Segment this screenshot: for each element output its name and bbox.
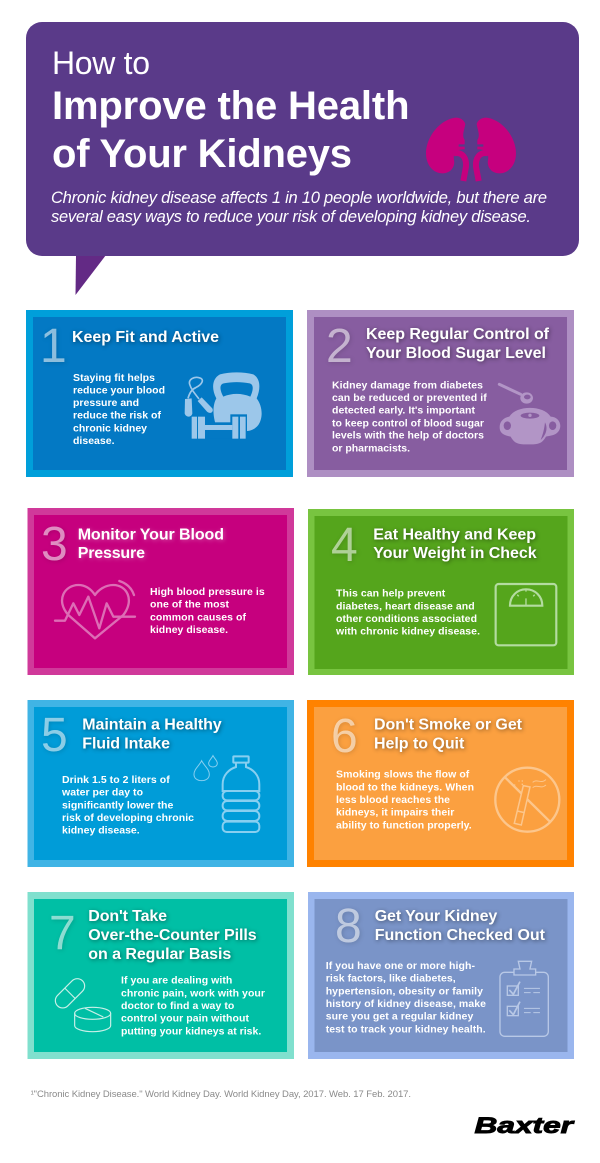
body 2: can be reduced or prevented if xyxy=(332,392,487,404)
body 8 xyxy=(326,960,486,1035)
title 2: Keep Regular Control of xyxy=(366,326,550,343)
title 4: Your Weight in Check xyxy=(373,545,537,562)
footnote citation: ¹"Chronic Kidney Disease." World Kidney Day. World Kidney Day, 2017. Web. 17 Feb. 2017. xyxy=(31,1089,411,1100)
body 7: putting your kidneys at risk. xyxy=(121,1025,261,1037)
body 7: doctor to find a way to xyxy=(121,1000,234,1012)
title 7: Over-the-Counter Pills xyxy=(88,927,257,944)
body 5: water per day to xyxy=(61,787,143,799)
panel 4: Eat Healthy and Keep Your Weight in Check xyxy=(308,509,574,675)
body 6: Smoking slows the flow of xyxy=(336,769,470,781)
body 6: blood to the kidneys. When xyxy=(336,781,474,793)
title 6: Help to Quit xyxy=(374,735,465,752)
body 3: common causes of xyxy=(150,611,246,623)
heading: How to: How to xyxy=(52,45,150,81)
icon: heart with pulse xyxy=(55,581,135,638)
icon: kettlebell, dumbbell and jump rope xyxy=(185,372,262,439)
body 4: diabetes, heart disease and xyxy=(336,600,475,612)
body 3: High blood pressure is xyxy=(150,586,265,598)
body 6: ability to function properly. xyxy=(336,819,472,831)
body 6: kidneys, it impairs their xyxy=(336,807,454,819)
number 2: 2 xyxy=(326,320,353,373)
number 8: 8 xyxy=(335,900,362,953)
body 8: history of kidney disease, make xyxy=(326,998,486,1010)
title 2: Your Blood Sugar Level xyxy=(366,345,546,362)
title 3: Monitor Your Blood xyxy=(78,526,224,544)
panel 3: Monitor Your Blood Pressure xyxy=(28,508,294,675)
body 4 xyxy=(335,588,480,638)
body 2: levels with the help of doctors xyxy=(332,430,484,442)
heading: Improve the Health of Your Kidneys xyxy=(52,84,410,176)
intro text xyxy=(51,189,547,226)
number 5: 5 xyxy=(41,709,68,762)
panel 6: Don't Smoke or Get Help to Quit xyxy=(307,700,574,867)
body 2: to keep control of blood sugar xyxy=(332,417,484,429)
body 5: significantly lower the xyxy=(62,799,173,811)
title 7: on a Regular Basis xyxy=(88,946,231,963)
number 1: 1 xyxy=(40,320,67,373)
panel 8: Get Your Kidney Function Checked Out xyxy=(308,892,574,1059)
title 4 xyxy=(373,526,537,562)
body 3 xyxy=(150,586,265,636)
title 8: Function Checked Out xyxy=(375,927,546,944)
body 6 xyxy=(336,769,474,831)
icon: pills xyxy=(52,976,111,1032)
body 3: one of the most xyxy=(150,599,230,611)
Baxter logo: Baxter xyxy=(474,1113,575,1138)
number 6: 6 xyxy=(331,710,358,763)
header speech bubble xyxy=(26,22,579,295)
body 7: If you are dealing with xyxy=(121,975,232,987)
intro text: several easy ways to reduce your risk of developing kidney disease. xyxy=(51,208,531,226)
number 7: 7 xyxy=(49,907,76,960)
body 5: kidney disease. xyxy=(62,825,140,837)
title 8: Get Your Kidney xyxy=(375,908,497,925)
title 5 xyxy=(82,716,222,752)
body 1: reduce your blood xyxy=(73,384,165,396)
title 7: Don't Take xyxy=(88,908,167,925)
panel 5: Maintain a Healthy Fluid Intake xyxy=(28,700,294,867)
body 8: hypertension, obesity or family xyxy=(326,985,483,997)
intro text: Chronic kidney disease affects 1 in 10 people worldwide, but there are xyxy=(51,189,547,207)
icon: water bottle and drops xyxy=(194,756,259,832)
title 5: Maintain a Healthy xyxy=(82,716,222,733)
title 4: Eat Healthy and Keep xyxy=(373,526,536,543)
body 1: disease. xyxy=(73,435,115,447)
body 8: risk factors, like diabetes, xyxy=(326,973,456,985)
number 4: 4 xyxy=(331,519,358,572)
body 2: Kidney damage from diabetes xyxy=(332,379,483,391)
body 2: or pharmacists. xyxy=(332,442,410,454)
icon: clipboard checklist xyxy=(500,961,548,1036)
heading: Improve the Health of Your Kidneys: Improve the Health xyxy=(52,84,410,128)
title 5: Fluid Intake xyxy=(82,735,170,752)
icon: sugar bowl and spoon xyxy=(499,384,560,444)
body 7: chronic pain, work with your xyxy=(121,987,265,999)
title 7 xyxy=(88,908,257,963)
body 2: detected early. It's important xyxy=(332,405,476,417)
body 1: chronic kidney xyxy=(73,422,147,434)
body 8: sure you get a regular kidney xyxy=(326,1011,473,1023)
title 6 xyxy=(374,716,523,752)
body 8: If you have one or more high- xyxy=(326,960,476,972)
body 8: test to track your kidney health. xyxy=(326,1023,486,1035)
title 3: Pressure xyxy=(78,545,145,562)
body 2 xyxy=(332,379,487,454)
body 1: pressure and xyxy=(73,397,139,409)
title 3 xyxy=(78,526,224,562)
body 1 xyxy=(73,372,165,447)
body 5 xyxy=(61,774,194,837)
body 4: with chronic kidney disease. xyxy=(335,626,480,638)
body 7 xyxy=(121,975,265,1037)
body 4: other conditions associated xyxy=(336,613,477,625)
icon: kidneys xyxy=(426,118,516,181)
panel 2: Keep Regular Control of Your Blood Sugar Level xyxy=(307,310,574,477)
title 6: Don't Smoke or Get xyxy=(374,716,523,733)
body 5: Drink 1.5 to 2 liters of xyxy=(62,774,170,786)
title 1: Keep Fit and Active xyxy=(72,329,219,346)
body 5: risk of developing chronic xyxy=(62,812,194,824)
title 8 xyxy=(375,908,546,944)
icon: no smoking sign xyxy=(495,768,559,832)
heading: Improve the Health of Your Kidneys: of Your Kidneys xyxy=(52,132,352,176)
title 2 xyxy=(366,326,550,362)
body 7: control your pain without xyxy=(121,1013,250,1025)
panel 7: Don't Take Over-the-Counter Pills on a Regular Basis xyxy=(28,892,294,1059)
body 6: less blood reaches the xyxy=(336,794,450,806)
icon: weighing scale xyxy=(496,584,556,645)
body 3: kidney disease. xyxy=(150,624,228,636)
body 1: reduce the risk of xyxy=(73,410,162,422)
body 4: This can help prevent xyxy=(336,588,446,600)
panel 1: Keep Fit and Active xyxy=(26,310,293,477)
body 1: Staying fit helps xyxy=(73,372,155,384)
number 3: 3 xyxy=(41,518,68,571)
